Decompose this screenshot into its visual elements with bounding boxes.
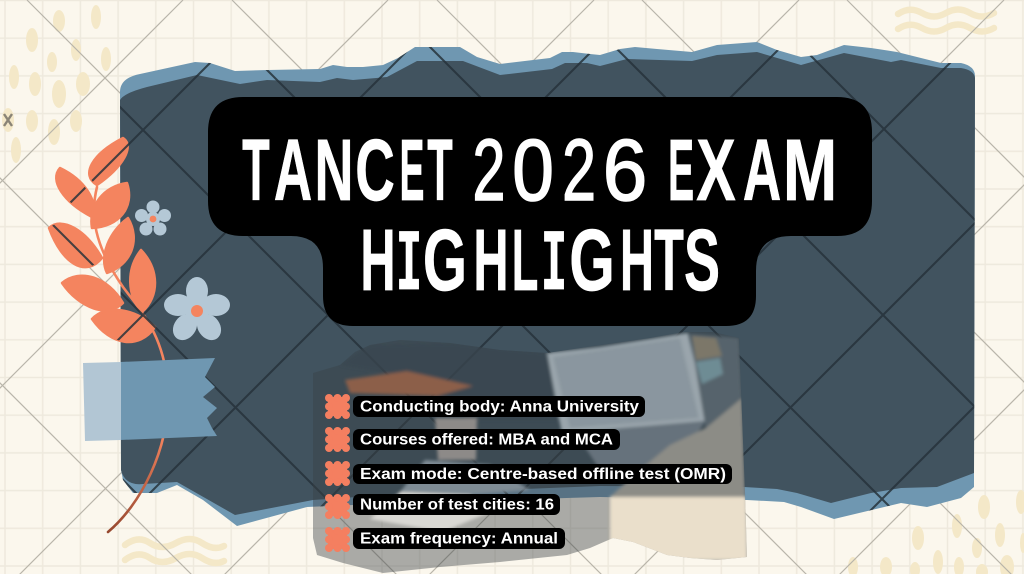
title text: E: [668, 122, 694, 219]
highlight row: conducting body: Conducting body: Anna University: [360, 398, 639, 416]
title text: A: [274, 122, 312, 219]
title text: H: [360, 212, 396, 309]
icon: branch stem: [94, 187, 168, 532]
photo: cup: [435, 418, 477, 460]
title text: A: [743, 122, 781, 219]
highlight row: conducting body: [325, 394, 645, 419]
photo: orange book: [345, 371, 473, 396]
title text: 2: [562, 122, 596, 219]
title text: H: [473, 212, 509, 309]
decorative dots: bottom right: [848, 490, 1024, 574]
photo: paper sheet: [400, 460, 530, 495]
title background plaque: [208, 97, 872, 326]
photo: laptop keyboard: [586, 420, 704, 464]
icon: small flower: [135, 200, 171, 236]
title text: X: [696, 122, 736, 219]
photo: books beside laptop: [692, 336, 722, 360]
title text: [242, 122, 837, 316]
photo: dark desk area: [447, 377, 452, 380]
dark diamond lattice over panel: [52, 47, 975, 511]
highlight row: exam frequency: [325, 527, 565, 552]
highlight row: test cities: [325, 494, 560, 519]
title text: E: [400, 122, 424, 219]
highlight row: courses offered: Courses offered: MBA and MCA: [360, 432, 613, 448]
photo: dark shade at right: [690, 334, 742, 430]
title text: T: [427, 122, 453, 219]
icon: large flower: [164, 277, 230, 345]
highlight row: test cities: Number of test cities: 16: [360, 496, 554, 514]
photo: laptop screen: [553, 338, 699, 428]
highlight row: exam mode: Exam mode: Centre-based offline test (OMR): [360, 466, 726, 483]
panel: torn blue backing: [120, 42, 975, 526]
title text: I: [396, 218, 422, 316]
highlight row: exam frequency: Exam frequency: Annual: [360, 530, 558, 548]
title text: M: [783, 122, 837, 219]
title text: 0: [512, 122, 554, 219]
title text: C: [355, 122, 395, 219]
title text: S: [684, 212, 720, 309]
title text: N: [315, 122, 353, 219]
photo: laptop frame: [547, 333, 708, 434]
title text: 2: [473, 122, 505, 219]
icon: torn washi tape: [83, 358, 217, 441]
decorative waves: top right: [898, 10, 994, 32]
title text: T: [654, 212, 684, 309]
photo: hand and beige table: [610, 398, 745, 497]
title text: 6: [603, 122, 647, 219]
photo: laptop and desk, faded torn paper: [300, 325, 760, 574]
highlight row: courses offered: [325, 427, 620, 452]
title text: G: [569, 212, 615, 309]
title text: H: [620, 212, 654, 309]
panel: dark slate torn paper: [120, 52, 975, 515]
decorative waves: bottom left: [125, 539, 224, 563]
title text: G: [423, 212, 467, 309]
icon: orange leaves: [49, 138, 155, 342]
title text: I: [541, 218, 567, 316]
title text: L: [512, 212, 538, 309]
title text: T: [242, 122, 270, 219]
highlight row: exam mode: [325, 461, 732, 486]
decorative dots: top left: [2, 5, 111, 163]
